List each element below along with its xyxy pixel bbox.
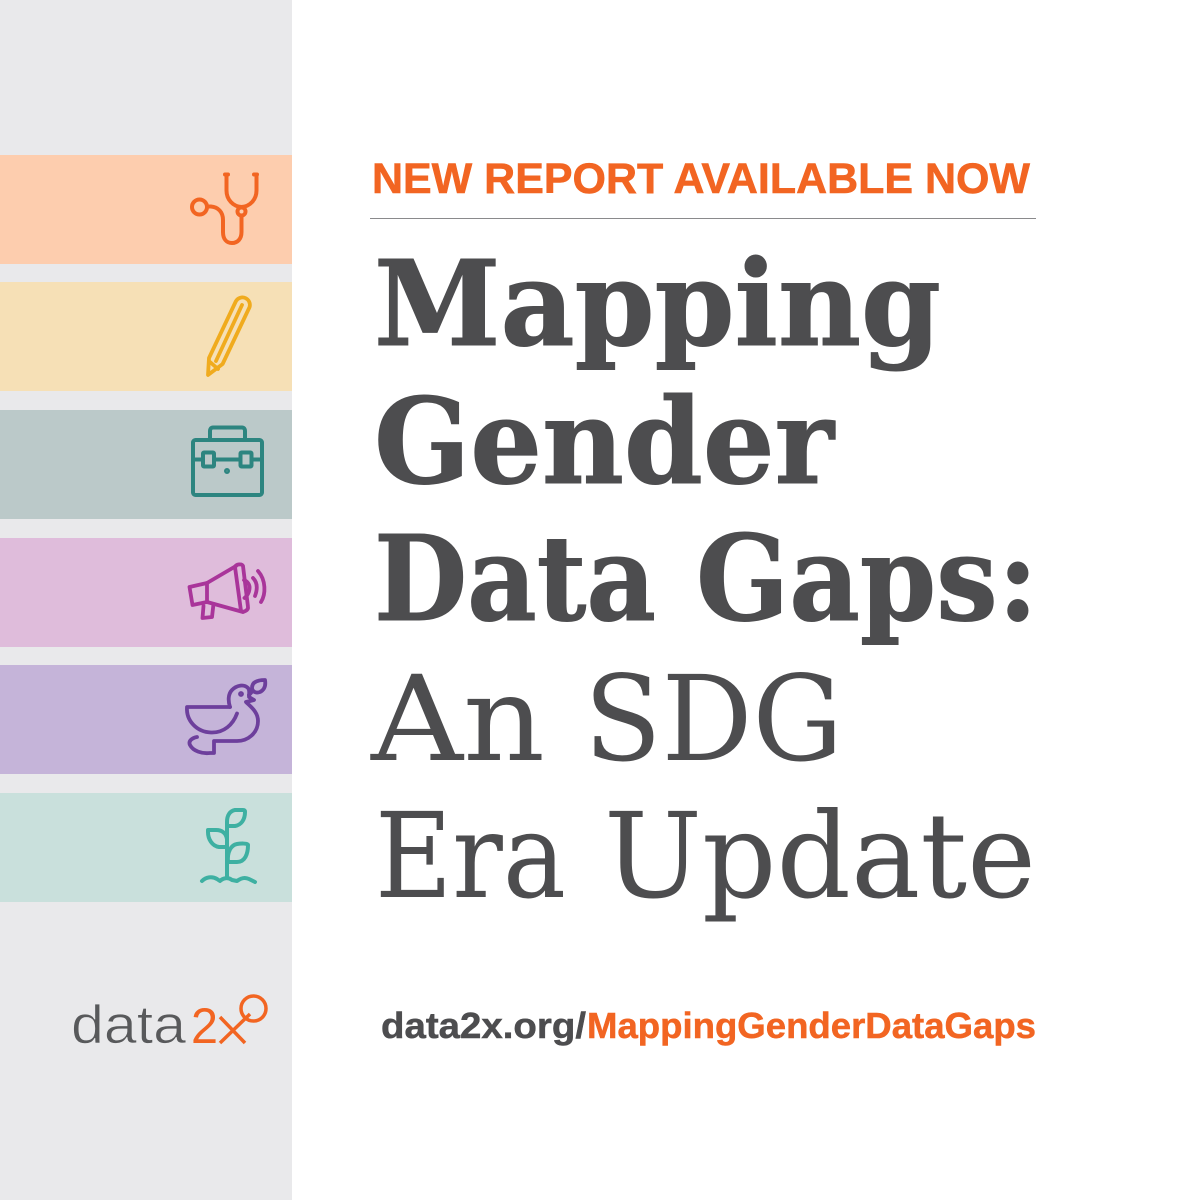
title: Gaps: [696, 509, 1038, 648]
title [370, 234, 1038, 925]
icon: dove [187, 680, 265, 753]
logo: data2x [71, 995, 266, 1055]
title: Gender [374, 372, 836, 511]
title: Mapping [374, 234, 941, 373]
band: voice [0, 538, 292, 647]
logo: data2x: x [218, 1042, 219, 1044]
band: environment [0, 793, 292, 902]
band: peace [0, 665, 292, 774]
icon: stethoscope [192, 174, 257, 243]
title: SDG [584, 650, 843, 788]
band: education [0, 282, 292, 391]
icon: toolbox [193, 428, 262, 495]
icon: megaphone [190, 564, 264, 618]
icon: sprout [202, 810, 255, 882]
logo: data2x: data [71, 995, 187, 1055]
title: Update [604, 787, 1036, 925]
url: MappingGenderDataGaps [587, 1005, 1036, 1046]
icon: pencil [208, 297, 250, 375]
band: economic [0, 410, 292, 519]
title: Era [375, 787, 566, 925]
logo: data2x: 2 [191, 998, 218, 1054]
rule [370, 218, 1036, 219]
url [381, 1005, 1036, 1046]
sidebar panel [0, 0, 292, 1200]
kicker: new report: NEW REPORT AVAILABLE NOW [372, 155, 1030, 203]
title: An [370, 650, 545, 788]
url: data2x.org/ [381, 1005, 586, 1046]
band: health [0, 155, 292, 264]
title: Data [374, 509, 656, 648]
